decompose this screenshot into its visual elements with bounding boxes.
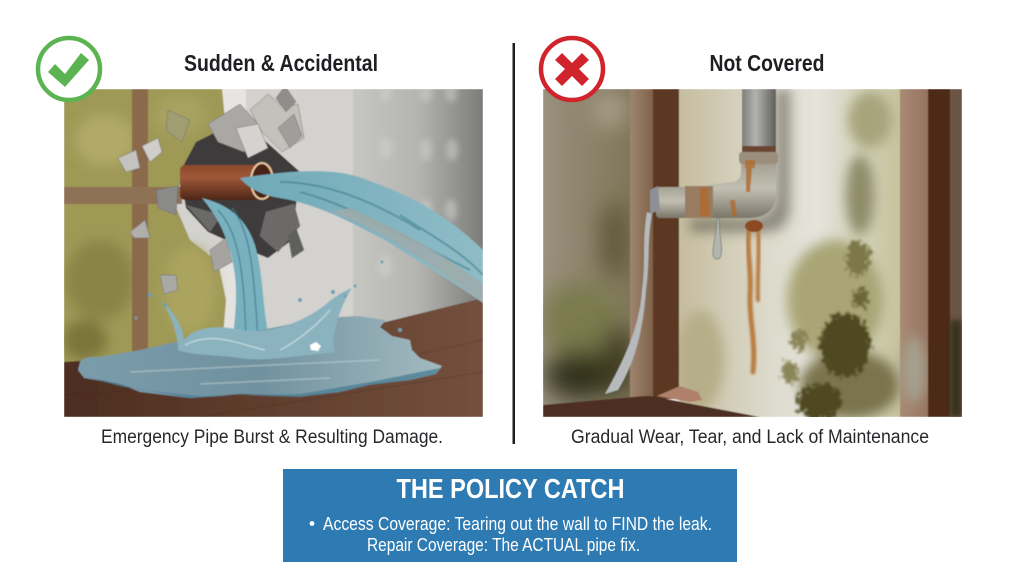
panel heading: THE POLICY CATCH xyxy=(396,473,624,504)
line: repair coverage: Repair Coverage: The ACTUAL pipe fix. xyxy=(367,535,640,555)
icon: green check mark xyxy=(38,38,100,100)
line: access coverage: Access Coverage: Tearing out the wall to FIND the leak. xyxy=(323,514,712,534)
photo: burst pipe xyxy=(63,84,483,417)
caption: burst: Emergency Pipe Burst & Resulting Damage. xyxy=(101,427,443,448)
divider xyxy=(512,43,515,444)
caption: wear: Gradual Wear, Tear, and Lack of Maintenance xyxy=(571,427,929,448)
heading: sudden and accidental: Sudden & Accidental xyxy=(184,50,378,76)
panel: the policy catch xyxy=(283,469,737,562)
heading: not covered: Not Covered xyxy=(710,50,824,76)
icon: red cross xyxy=(541,38,603,100)
bullet xyxy=(310,521,314,526)
photo: corroded pipe xyxy=(540,89,962,420)
